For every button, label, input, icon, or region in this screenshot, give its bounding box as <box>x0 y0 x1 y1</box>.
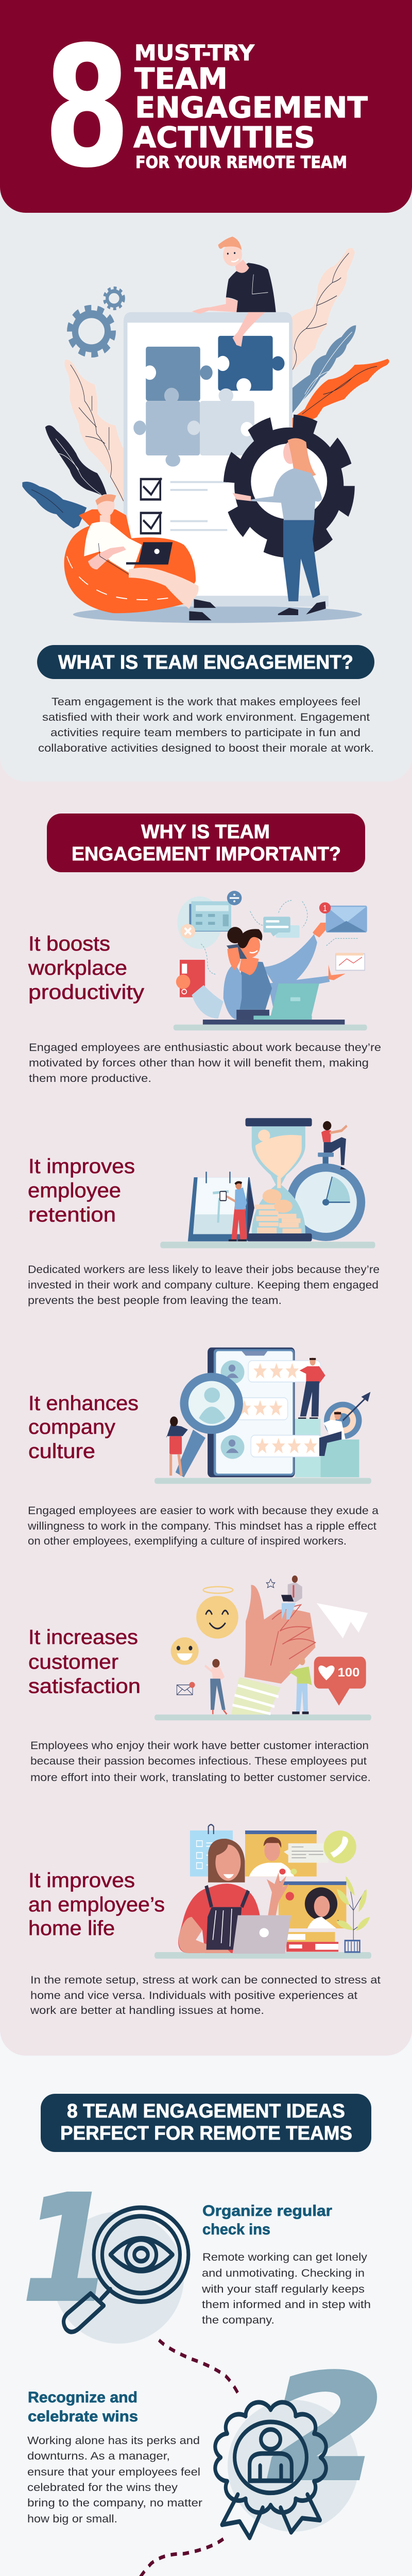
header banner <box>0 0 412 213</box>
illustration: multitasking woman <box>174 891 367 1030</box>
section heading: what is team engagement: WHAT IS TEAM ENGAGEMENT? <box>58 652 353 673</box>
hourglass <box>246 1118 312 1241</box>
woman standing <box>205 1659 227 1714</box>
text: idea 2: downturns. As a manager, <box>27 2450 170 2462</box>
calendar <box>188 1172 254 1241</box>
subheading: improves retention: retention <box>28 1204 116 1226</box>
text: idea 2: bring to the company, no matter <box>27 2497 202 2509</box>
subheading: improves retention <box>28 1155 135 1226</box>
man with laptop <box>281 1575 302 1620</box>
section heading: 8 ideas: PERFECT FOR REMOTE TEAMS <box>60 2123 352 2144</box>
text block: definition: Team engagement is the work that makes employees feel <box>52 696 360 708</box>
text: idea 1: and unmotivating. Checking in <box>202 2267 365 2279</box>
text block: culture: willingness to work in the company. This mindset has a ripple effect <box>27 1520 376 1532</box>
text block: productivity: them more productive. <box>29 1073 151 1084</box>
text block: retention: prevents the best people from leaving the team. <box>28 1295 282 1307</box>
text block: culture: Engaged employees are easier to work with because they exude a <box>28 1505 379 1517</box>
title text: ENGAGEMENT <box>135 91 368 125</box>
icon: like badge <box>314 1657 366 1706</box>
subheading: customer satisfaction: customer <box>28 1651 118 1673</box>
icon: thumbs up hand <box>231 1585 315 1715</box>
subheading: enhances culture: culture <box>28 1440 95 1463</box>
text block: definition <box>38 696 374 754</box>
subheading: home life: home life <box>28 1917 115 1940</box>
text block: productivity: Engaged employees are enthusiastic about work because they’re <box>29 1042 381 1054</box>
title text: MUST-TRY <box>134 40 255 65</box>
woman turning gear <box>233 438 326 615</box>
section heading: why important <box>47 814 365 872</box>
title text: FOR YOUR REMOTE TEAM <box>135 152 347 172</box>
magnifier <box>176 1373 243 1477</box>
video window bottom <box>279 1882 346 1928</box>
checklist note <box>190 1824 233 1876</box>
title numeral 8: 8 <box>44 11 130 204</box>
subheading: improves retention: It improves <box>28 1155 135 1178</box>
section heading: what is team engagement <box>37 645 374 679</box>
illustration: phone with ratings and magnifier <box>154 1347 371 1484</box>
chart card <box>336 953 365 970</box>
woman with magnifier <box>166 1416 188 1476</box>
text: idea 1: Organize regular <box>202 2202 332 2219</box>
section heading: 8 ideas: 8 TEAM ENGAGEMENT IDEAS <box>67 2100 345 2122</box>
icon: small smiley <box>171 1637 199 1665</box>
text: idea 1: Remote working can get lonely <box>202 2251 368 2263</box>
title text: ACTIVITIES <box>133 121 315 155</box>
man with phone <box>220 1181 247 1241</box>
text: idea 2: Working alone has its perks and <box>27 2435 200 2447</box>
hero illustration: team assembling puzzle <box>22 236 389 623</box>
tablet board <box>124 312 329 606</box>
connector lines <box>201 901 358 974</box>
woman figure <box>192 923 346 1020</box>
text: idea 2: how big or small. <box>27 2513 117 2525</box>
title text <box>133 40 368 172</box>
text: idea 2 <box>27 2389 202 2525</box>
text: idea 2: Recognize and <box>28 2389 138 2406</box>
man standing <box>298 1358 325 1419</box>
text block: home life: home and vice versa. Individuals with positive experiences at <box>30 1990 357 2002</box>
leaves left <box>22 360 127 529</box>
idea 1: check ins <box>23 2165 371 2344</box>
icon: envelope <box>177 1682 195 1695</box>
text block: customer: because their passion becomes infectious. These employees put <box>30 1755 367 1767</box>
man on beanbag <box>64 494 216 620</box>
icon: divide <box>227 891 242 905</box>
envelope with badge <box>319 902 367 933</box>
calculator <box>189 901 231 931</box>
icon: magnifier with eye and numeral 1 <box>23 2165 188 2344</box>
text block: culture: on other employees, exemplifying a culture of inspired workers. <box>28 1535 347 1547</box>
text: idea 1: the company. <box>202 2314 274 2326</box>
puzzle pieces <box>133 336 285 467</box>
subheading: customer satisfaction <box>28 1626 141 1698</box>
subheading: home life: an employee’s <box>28 1893 165 1916</box>
subheading: home life <box>28 1869 165 1940</box>
subheading: home life: It improves <box>28 1869 135 1892</box>
stopwatch <box>286 1153 365 1241</box>
text: idea 1: with your staff regularly keeps <box>201 2283 365 2295</box>
icon: magnifier with eye and numeral 1: 1 <box>23 2165 111 2333</box>
text: idea 2: celebrate wins <box>28 2408 138 2425</box>
text block: culture <box>27 1505 379 1547</box>
subheading: boosts productivity: It boosts <box>28 933 110 955</box>
subheading: enhances culture: company <box>28 1416 115 1438</box>
ground shadow <box>73 606 362 623</box>
icon: large gear <box>71 309 112 353</box>
icon: cross <box>181 924 195 938</box>
icon: like badge: 100 <box>338 1665 359 1679</box>
books <box>286 1932 338 1952</box>
chat bubbles <box>263 917 300 938</box>
text block: retention: invested in their work and company culture. Keeping them engaged <box>28 1279 379 1291</box>
leaves right <box>289 248 389 431</box>
text block: definition: activities require team members to participate in fun and <box>50 727 360 739</box>
avatars <box>221 1360 244 1459</box>
subheading: improves retention: employee <box>28 1179 121 1202</box>
text: idea 1: them informed and in step with <box>202 2299 371 2311</box>
man leaning over board <box>192 236 276 347</box>
envelope with badge: 1 <box>323 904 327 913</box>
text block: home life: work are better at handling issues at home. <box>30 2005 264 2016</box>
section heading: why important: ENGAGEMENT IMPORTANT? <box>72 843 341 865</box>
subheading: customer satisfaction: satisfaction <box>28 1675 141 1698</box>
text block: productivity <box>29 1042 381 1084</box>
text block: definition: satisfied with their work and work environment. Engagement <box>42 711 370 723</box>
icon: paper plane <box>317 1603 368 1638</box>
illustration: hourglass, calendar and stopwatch <box>160 1118 375 1248</box>
phone <box>208 1347 295 1477</box>
man pointing <box>289 1657 312 1714</box>
title text: TEAM <box>134 62 228 96</box>
steps and target <box>295 1392 370 1477</box>
text block: customer: more effort into their work, translating to better customer service. <box>30 1772 371 1784</box>
man sitting <box>319 1411 346 1456</box>
icon: award badge and numeral 2: 2 <box>268 2345 384 2513</box>
section heading: 8 ideas <box>41 2094 371 2152</box>
subheading: customer satisfaction: It increases <box>28 1626 138 1649</box>
icon: smiley with halo <box>196 1587 238 1638</box>
dashed connectors between ideas <box>93 2340 274 2576</box>
illustration: thumbs up and smileys <box>154 1575 371 1720</box>
icon: award badge and numeral 2 <box>215 2345 384 2538</box>
subheading: enhances culture <box>28 1392 139 1463</box>
speech bubble <box>284 1843 329 1862</box>
big gear <box>230 422 348 549</box>
text block: retention <box>28 1264 380 1307</box>
subheading: enhances culture: It enhances <box>28 1392 139 1415</box>
subheading: boosts productivity: productivity <box>28 981 144 1004</box>
text: idea 1 <box>201 2202 371 2326</box>
plant <box>336 1876 370 1952</box>
text block: home life <box>30 1974 381 2016</box>
text block: definition: collaborative activities designed to boost their morale at work. <box>38 742 374 754</box>
text: idea 2: celebrated for the wins they <box>27 2482 178 2494</box>
binder <box>180 960 205 997</box>
woman with laptop <box>178 1839 291 1954</box>
woman sitting <box>318 1121 347 1170</box>
text block: productivity: motivated by forces other than how it will benefit them, making <box>29 1057 369 1069</box>
text block: customer: Employees who enjoy their work have better customer interaction <box>30 1740 369 1752</box>
panel: what is team engagement background <box>0 103 412 782</box>
text block: customer <box>30 1740 371 1784</box>
text: idea 2: ensure that your employees feel <box>27 2466 200 2478</box>
panel: why important background <box>0 670 412 2056</box>
illustration: woman on video calls <box>154 1824 371 1959</box>
icon: star <box>266 1579 275 1588</box>
icon: phone <box>324 1831 356 1863</box>
section heading: why important: WHY IS TEAM <box>141 821 270 843</box>
subheading: boosts productivity <box>28 933 144 1004</box>
laptop <box>253 984 319 1020</box>
text block: home life: In the remote setup, stress at work can be connected to stress at <box>30 1974 381 1986</box>
text block: retention: Dedicated workers are less likely to leave their jobs because they’re <box>28 1264 380 1276</box>
checklist <box>141 478 227 533</box>
idea 2: recognize wins <box>27 2345 384 2538</box>
video window top <box>245 1831 317 1876</box>
icon: small gear <box>105 289 124 308</box>
subheading: boosts productivity: workplace <box>28 957 127 979</box>
text: idea 1: check ins <box>202 2221 270 2238</box>
rating cards with stars <box>236 1361 322 1457</box>
